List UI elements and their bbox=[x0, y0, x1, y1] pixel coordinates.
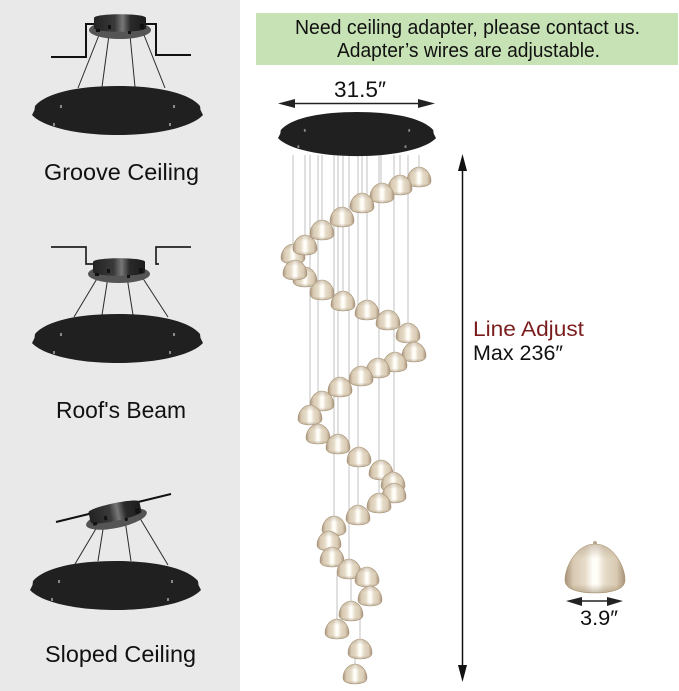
label: sloped ceiling: Sloped Ceiling bbox=[45, 641, 196, 667]
label: line adjust: Max 236″ bbox=[473, 341, 563, 365]
callout: adapter note: Adapter’s wires are adjustable. bbox=[337, 40, 600, 62]
dimension: canopy width: 31.5″ bbox=[334, 77, 386, 102]
dimension: height arrow bbox=[458, 154, 467, 682]
pendants bbox=[281, 167, 431, 684]
diagram: groove ceiling bbox=[32, 14, 203, 135]
large pendant bbox=[565, 541, 625, 593]
label: groove ceiling: Groove Ceiling bbox=[44, 159, 199, 185]
label: roof's beam: Roof's Beam bbox=[56, 397, 186, 423]
pendant detail bbox=[565, 541, 625, 630]
pendant width arrow bbox=[575, 600, 614, 602]
diagram: sloped ceiling bbox=[30, 494, 201, 610]
label: line adjust: Line Adjust bbox=[473, 317, 584, 341]
callout: adapter note bbox=[256, 13, 678, 65]
wires bbox=[293, 155, 419, 664]
dimension: canopy width bbox=[278, 77, 435, 108]
callout: adapter note: Need ceiling adapter, please contact us. bbox=[295, 17, 640, 39]
diagram: roof's beam bbox=[32, 247, 203, 363]
label: line adjust bbox=[473, 317, 584, 365]
panel: ceiling types bbox=[0, 0, 240, 691]
pendant width label: 3.9″ bbox=[580, 607, 619, 630]
canopy bbox=[278, 112, 436, 156]
chandelier bbox=[278, 112, 436, 684]
